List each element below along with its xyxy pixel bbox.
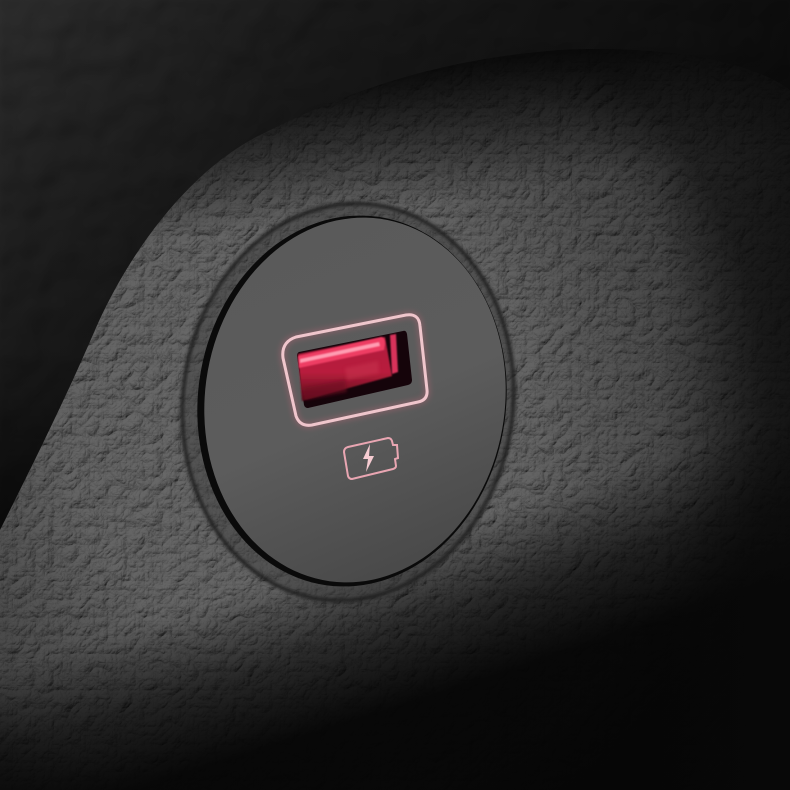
battery icon (344, 438, 398, 479)
recess groove around disc (157, 182, 539, 622)
port strip highlight (300, 342, 380, 363)
port glow (283, 315, 427, 425)
shadow: lower area (0, 466, 790, 790)
port inner lit area (345, 361, 379, 380)
disc dark rim (174, 195, 530, 607)
port opening (297, 331, 412, 408)
port side contact (390, 334, 398, 374)
shadow: top edge (152, 49, 774, 233)
disc face (181, 198, 529, 602)
port bright strip (298, 337, 385, 368)
port inner shadow (303, 380, 347, 400)
shadow: right side (689, 82, 790, 486)
port outline (283, 315, 427, 425)
bolt (363, 444, 374, 472)
USB port (283, 315, 427, 425)
port interior (298, 337, 392, 401)
